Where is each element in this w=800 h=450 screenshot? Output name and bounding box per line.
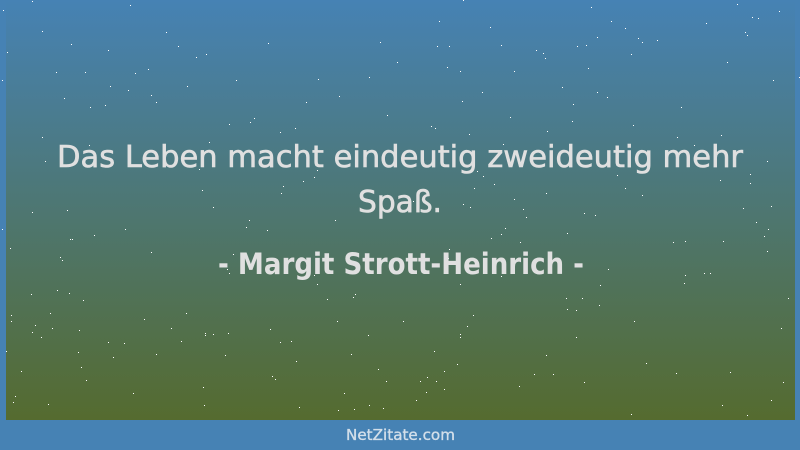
author: - Margit Strott-Heinrich - [218,247,584,281]
quote text: Spaß. [358,185,442,220]
quote text [57,140,744,220]
quote text: Das Leben macht eindeutig zweideutig mehr [57,140,744,175]
footer brand: NetZitate.com [346,426,455,444]
